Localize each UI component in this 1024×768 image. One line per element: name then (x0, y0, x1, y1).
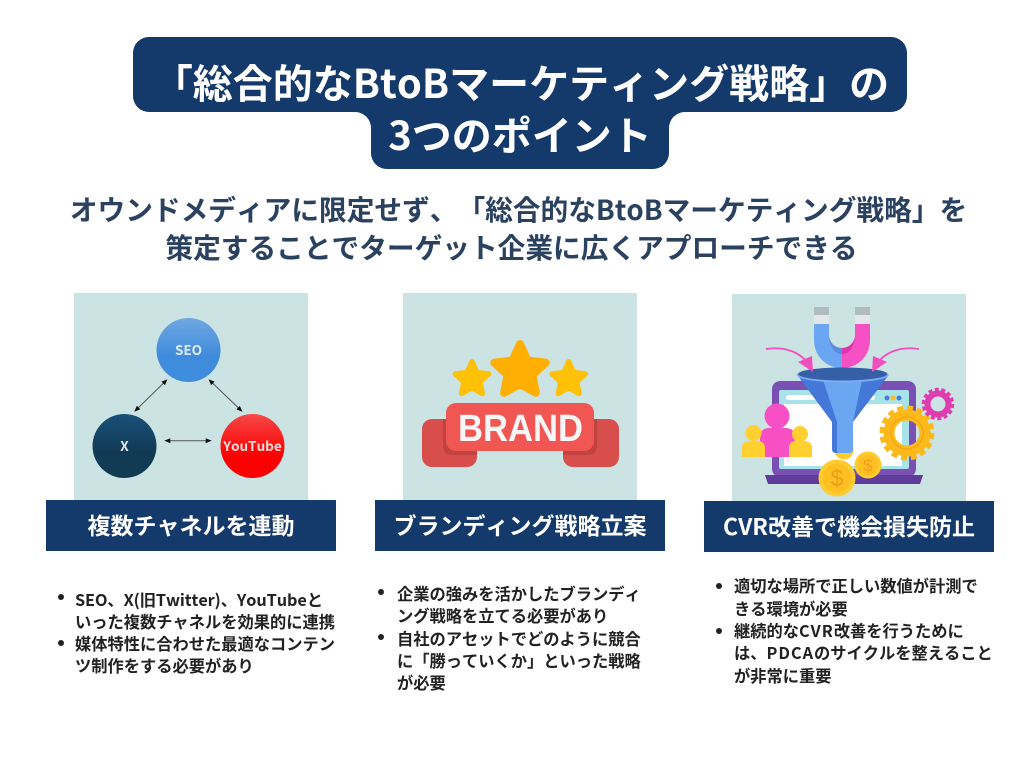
text block: CVR bullets: きる環境が必要 (734, 596, 848, 620)
text block: channel bullets: ツ制作をする必要があり (75, 653, 254, 677)
heading bar: CVR: CVR改善で機会損失防止 (723, 508, 975, 542)
title banner: 「総合的なBtoBマーケティング戦略」の (153, 52, 889, 110)
icon: coins: $ (831, 465, 844, 491)
heading bar: channels: 複数チャネルを連動 (88, 507, 294, 541)
text block: branding bullets: が必要 (397, 670, 446, 694)
icon: pink arrows (766, 348, 919, 372)
title banner: 3つのポイント (388, 104, 652, 162)
icon: gears (882, 390, 952, 458)
text block: CVR bullets: が非常に重要 (734, 663, 832, 687)
node: YouTube: YouTube (222, 435, 282, 455)
node: X: X (120, 435, 129, 455)
text block: CVR bullets: 継続的なCVR改善を行うために (734, 618, 964, 642)
icon: brand ribbon: BRAND (458, 408, 583, 450)
text block: CVR bullets: は、PDCAのサイクルを整えること (734, 640, 993, 664)
text block: branding bullets: 企業の強みを活かしたブランディ (397, 581, 641, 605)
icon: three stars (455, 344, 586, 394)
panel: brand badge (403, 293, 637, 500)
text block: branding bullets: に「勝っていくか」といった戦略 (397, 648, 641, 672)
icon: brand ribbon (422, 403, 619, 467)
heading bar: channels (46, 500, 336, 551)
icon: coins: $ (863, 456, 873, 475)
text block: channel bullets: SEO、X(旧Twitter)、YouTubeと (75, 587, 323, 611)
icon: magnet (814, 307, 870, 368)
text block: branding bullets: 自社のアセットでどのように競合 (397, 626, 641, 650)
panel: multi-channel diagram (74, 293, 308, 500)
heading bar: branding: ブランディング戦略立案 (394, 507, 646, 541)
text block: channel bullets (58, 587, 335, 677)
heading bar: branding (375, 500, 665, 551)
node: X (92, 414, 156, 478)
text block: CVR bullets: 適切な場所で正しい数値が計測で (734, 573, 978, 597)
icon: funnel (797, 368, 889, 453)
text block: branding bullets: ング戦略を立てる必要があり (397, 603, 608, 627)
text block: channel bullets: いった複数チャネルを効果的に連携 (75, 609, 335, 633)
icon: laptop (765, 381, 923, 484)
subtitle (70, 188, 967, 266)
node: YouTube (220, 414, 284, 478)
text block: branding bullets (378, 581, 641, 694)
text block: CVR bullets (716, 573, 993, 687)
subtitle: オウンドメディアに限定せず、「総合的なBtoBマーケティング戦略」を (70, 188, 967, 228)
node: SEO: SEO (175, 339, 202, 359)
panel: funnel illustration (732, 294, 966, 501)
title banner (133, 37, 907, 169)
icon: people (742, 404, 812, 457)
node: SEO (156, 318, 220, 382)
text block: channel bullets: 媒体特性に合わせた最適なコンテン (75, 631, 335, 655)
arrows between channels (135, 380, 242, 441)
heading bar: CVR (704, 501, 994, 552)
icon: coins (818, 440, 882, 496)
subtitle: 策定することでターゲット企業に広くアプローチできる (165, 226, 858, 266)
